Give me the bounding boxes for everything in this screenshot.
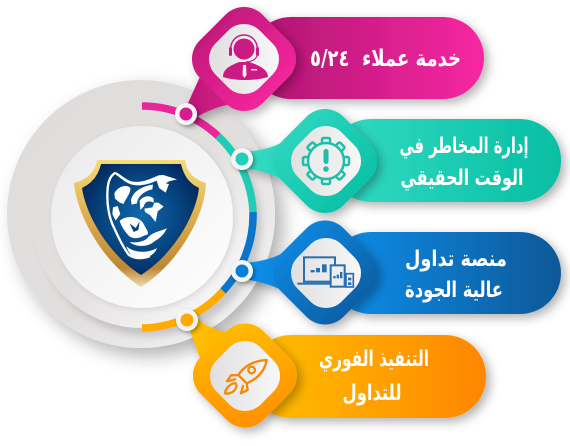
diamond with pointer [182,313,308,438]
dot: blue [231,260,253,282]
label: التنفيذ الفوري [319,347,429,372]
item: instant execution [182,313,486,438]
item: trading platform [245,210,561,335]
icon: warning gear [303,138,349,184]
icon panel [282,229,370,317]
shield logo [74,160,206,287]
wolf face [107,172,177,259]
pill [330,232,561,314]
central disc [7,80,275,348]
icon: rocket [225,360,267,394]
item: customer service [181,0,484,122]
segmented arc [142,106,253,328]
connector dots [175,103,253,331]
label [405,247,507,303]
label: خدمة عملاء ٥/٢٤ [310,46,461,72]
dot: orange [176,309,198,331]
label: منصة تداول [405,247,507,272]
diamond with pointer [181,0,307,122]
icon panel [200,15,288,103]
icon panel [282,117,370,205]
pill [250,17,484,99]
dot: teal [231,148,253,170]
pill [330,119,561,202]
dot: pink [175,103,197,125]
diamond with pointer [245,210,388,335]
label [319,347,429,406]
pill [250,335,486,418]
icon: devices [297,257,353,287]
label [400,134,528,191]
label: للتداول [342,381,402,406]
label: عالية الجودة [405,278,503,303]
item: real-time risk management [245,98,561,224]
icon panel [201,332,289,420]
label: الوقت الحقيقي [400,166,524,191]
diamond with pointer [245,98,388,224]
icon: headset agent [223,35,268,80]
